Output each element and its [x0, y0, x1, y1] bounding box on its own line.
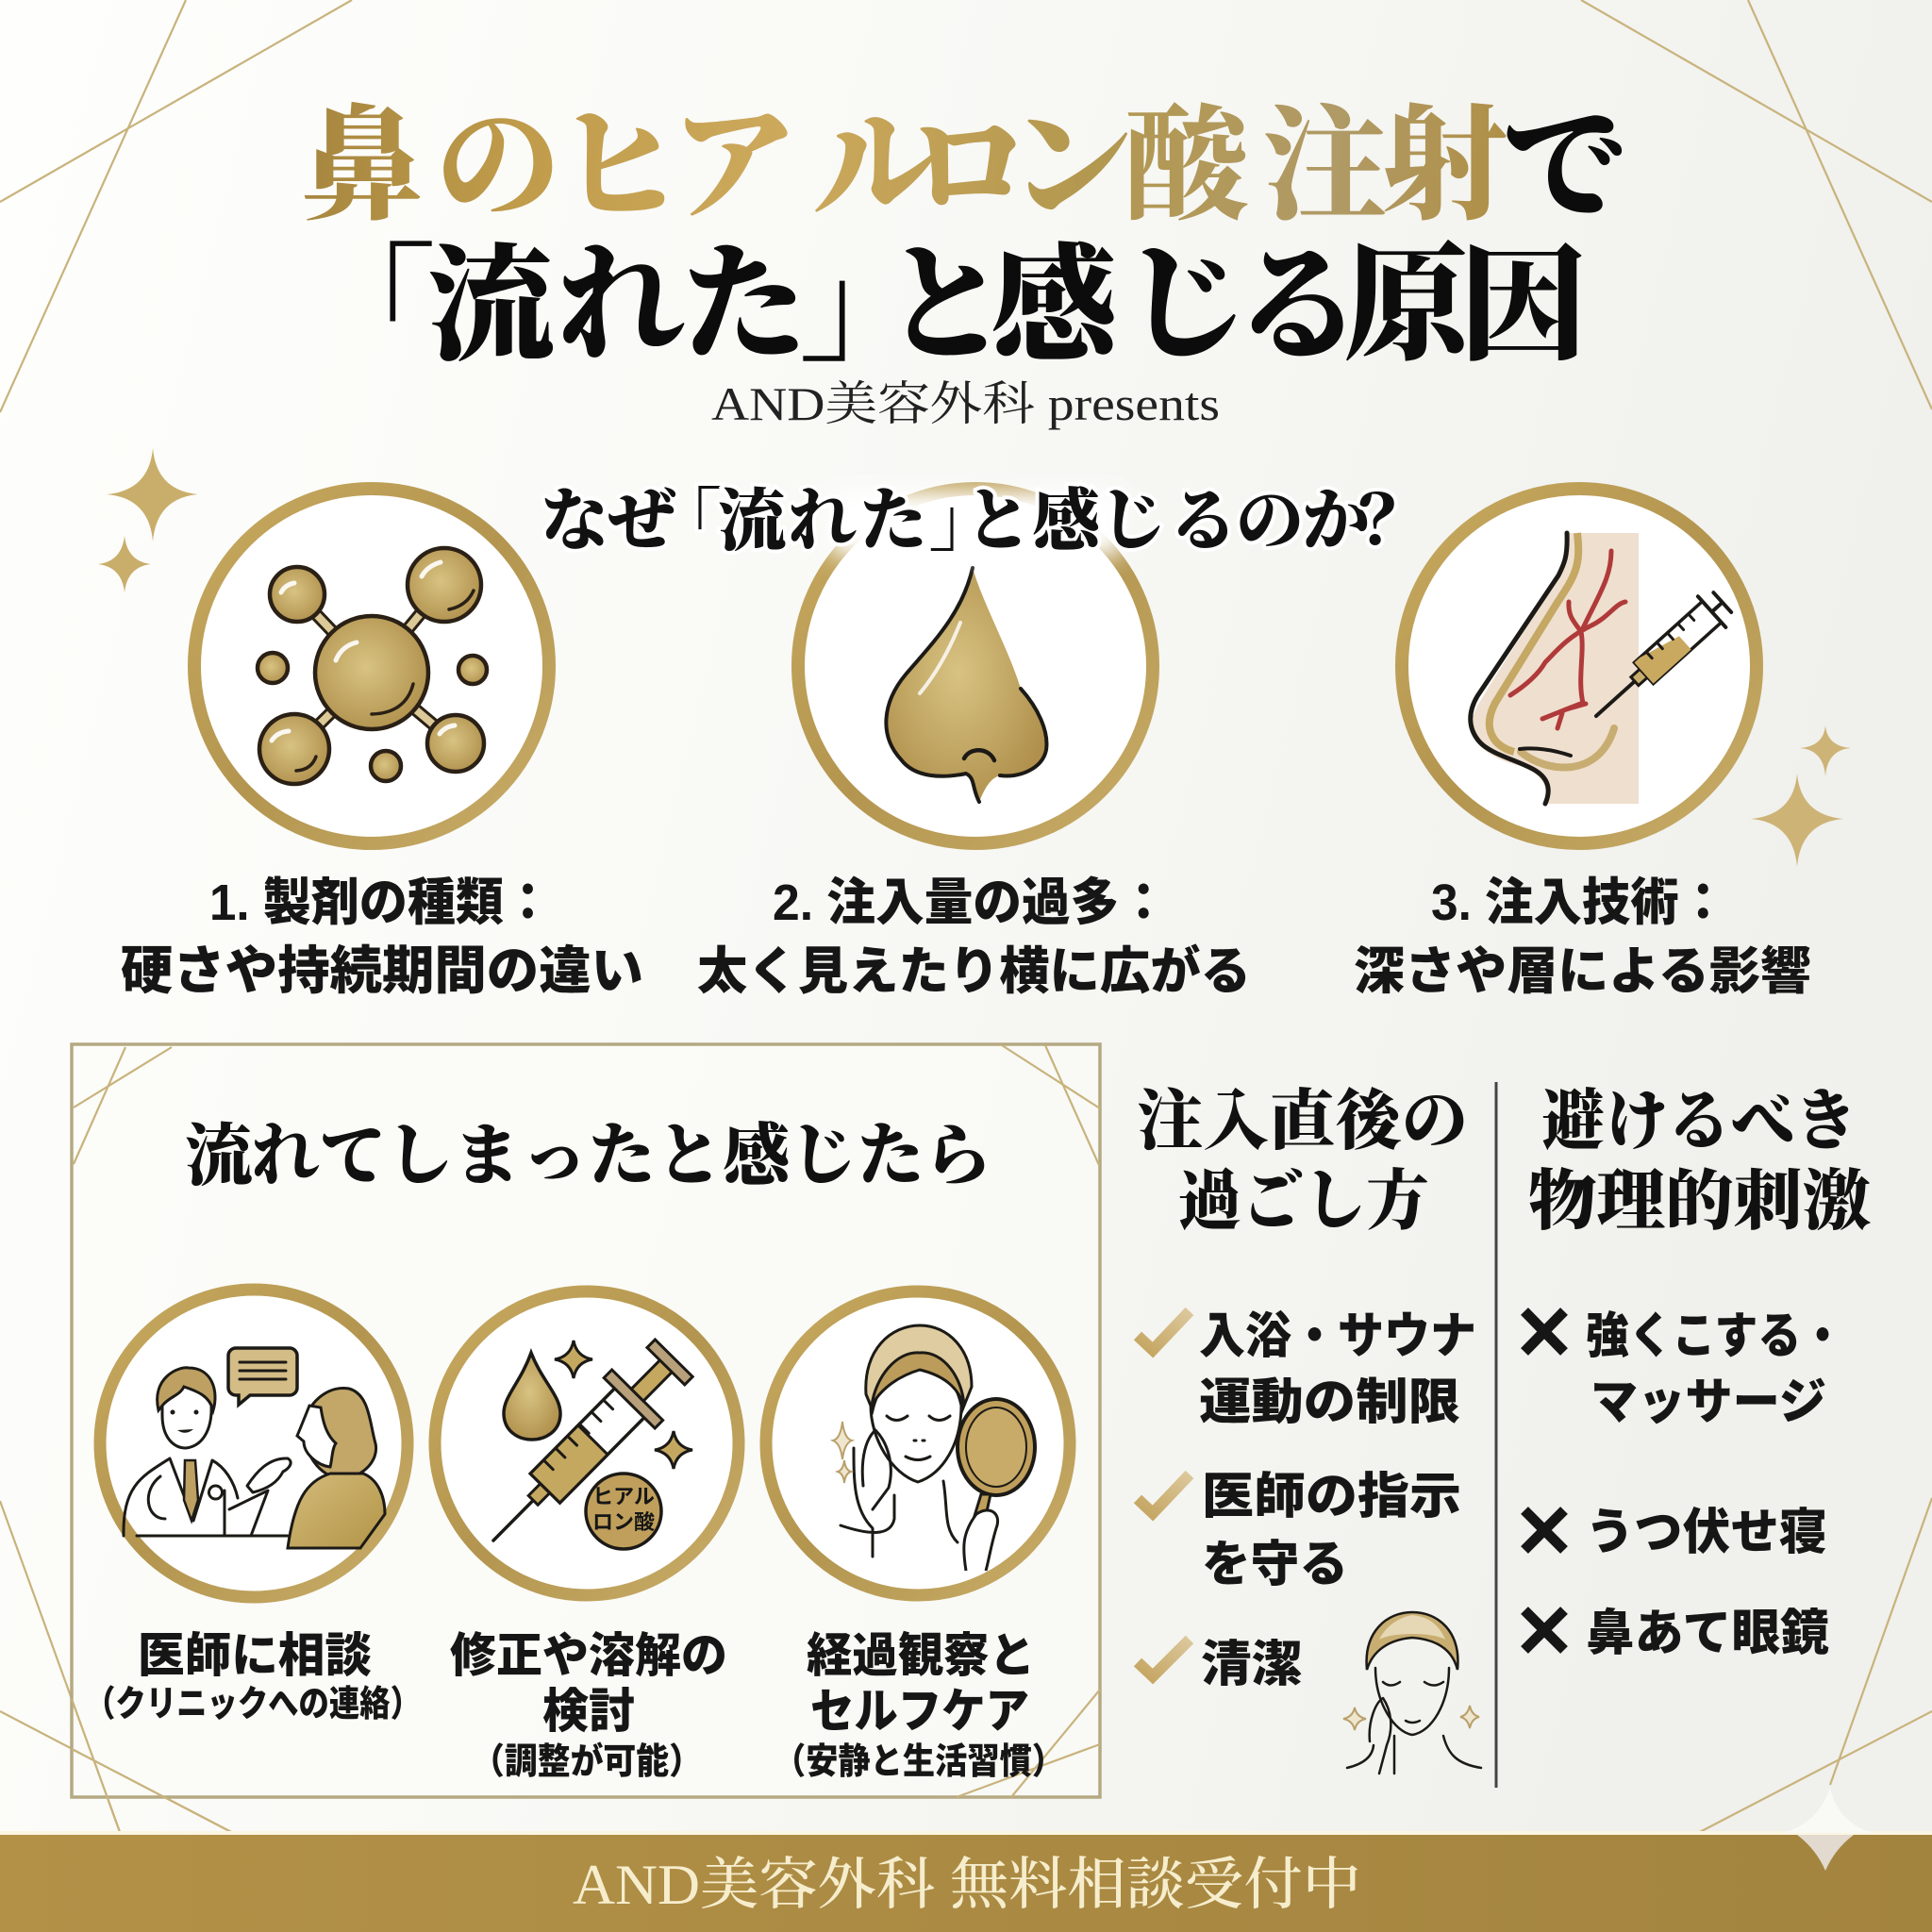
column heading: 注入直後の: [1137, 1086, 1468, 1158]
cross item 2: うつ伏せ寝: [1586, 1506, 1827, 1560]
icon: syringe and droplet: ロン酸: [592, 1510, 655, 1534]
caption 1: 1. 製剤の種類：: [209, 874, 552, 931]
sparkles right: [1751, 725, 1851, 867]
column heading: 避けるべき: [1541, 1086, 1857, 1158]
caption 2: [697, 874, 1251, 1000]
caption: self care: 経過観察と: [807, 1629, 1035, 1682]
check item 2: [1138, 1470, 1461, 1592]
column heading: [1137, 1086, 1468, 1239]
cross item 1: マッサージ: [1591, 1375, 1826, 1430]
column heading: 物理的刺激: [1528, 1166, 1871, 1239]
caption: correction: 修正や溶解の: [450, 1629, 727, 1682]
icon: small face: [1343, 1612, 1481, 1774]
caption 1: 硬さや持続期間の違い: [121, 941, 643, 1000]
footer text: AND美容外科 無料相談受付中: [573, 1854, 1361, 1916]
icon: syringe and droplet: [435, 1291, 739, 1595]
caption: self care: （安静と生活習慣）: [774, 1742, 1064, 1782]
caption 3: [1354, 874, 1811, 1000]
cross item 3: 鼻あて眼鏡: [1586, 1607, 1829, 1661]
title: 「流れた」と感じる原因: [308, 237, 1587, 376]
panel heading: 流れてしまったと感じたら: [185, 1119, 991, 1194]
column heading: [1528, 1086, 1871, 1239]
footer band: [0, 1788, 1932, 1932]
check item 3: 清潔: [1201, 1638, 1302, 1692]
check item 1: [1138, 1309, 1476, 1430]
cross item 1: [1524, 1309, 1844, 1430]
panel: what to do: [72, 1044, 1100, 1833]
caption: correction: （調整が可能）: [472, 1741, 702, 1782]
sparkles top left: [98, 448, 198, 592]
icon: woman with mirror: [766, 1291, 1070, 1595]
caption 2: 太く見えたり横に広がる: [697, 942, 1251, 1000]
caption: consult: [85, 1629, 421, 1724]
check item 1: 運動の制限: [1199, 1375, 1460, 1430]
white halo behind section heading: [830, 491, 1123, 557]
check item 3: [1138, 1638, 1302, 1692]
caption 3: 3. 注入技術：: [1431, 874, 1727, 931]
caption: self care: [774, 1629, 1064, 1782]
check item 2: を守る: [1202, 1538, 1348, 1592]
caption 2: 2. 注入量の過多：: [773, 874, 1168, 931]
circle icon: nose: [798, 489, 1153, 843]
caption: correction: 検討: [542, 1685, 635, 1738]
caption: consult: 医師に相談: [138, 1629, 372, 1682]
caption: consult: （クリニックへの連絡）: [85, 1685, 421, 1724]
title: で: [1502, 97, 1626, 236]
cross item 1: 強くこする・: [1586, 1309, 1844, 1364]
icon: doctor consultation: [100, 1290, 408, 1597]
caption 1: [121, 874, 643, 1000]
caption 3: 深さや層による影響: [1354, 943, 1811, 1000]
check item 1: 入浴・サウナ: [1199, 1309, 1476, 1364]
column heading: 過ごし方: [1178, 1166, 1429, 1239]
subtitle: AND美容外科 presents: [711, 377, 1220, 430]
check item 2: 医師の指示: [1202, 1470, 1461, 1524]
column: aftercare: [1137, 1086, 1481, 1774]
divider: [1494, 1082, 1498, 1788]
title: [300, 97, 1626, 376]
caption: correction: [450, 1629, 727, 1782]
title: 鼻のヒアルロン酸注射: [300, 97, 1507, 236]
column: things to avoid: [1524, 1086, 1871, 1661]
caption: self care: セルフケア: [810, 1685, 1029, 1738]
circle icon: nose with vessels and syringe: [1402, 489, 1757, 843]
circle icon: molecule: [194, 489, 549, 843]
section heading: なぜ「流れた」と感じるのか？: [541, 484, 1411, 559]
icon: syringe and droplet: ヒアル: [592, 1485, 655, 1508]
